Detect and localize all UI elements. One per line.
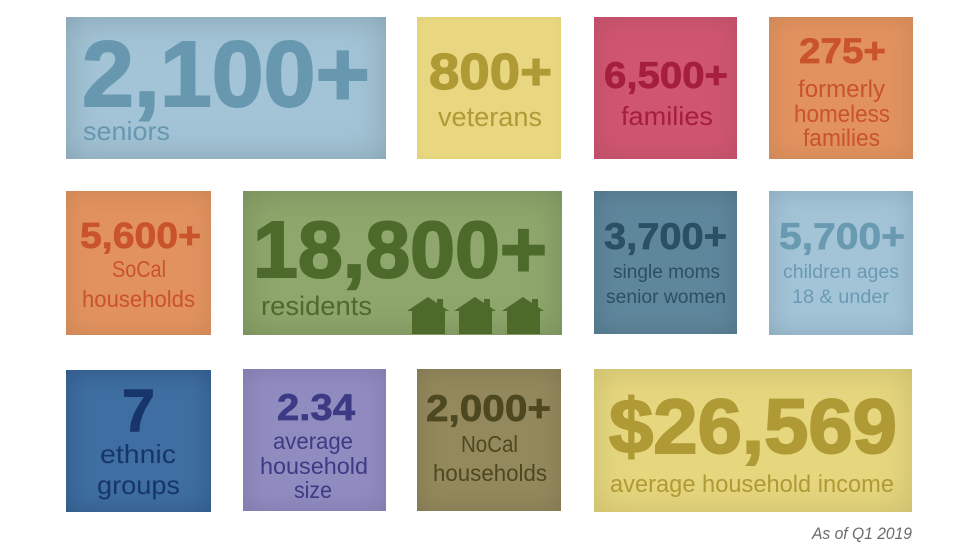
label: average household size: size: [294, 477, 332, 503]
label: formerly homeless families: homeless: [794, 101, 890, 128]
footnote: As of Q1 2019: [811, 525, 912, 543]
label: average household size: [260, 428, 368, 503]
panel: children: [769, 191, 913, 335]
panel: SoCal households: [66, 191, 211, 335]
label: children ages 18 & under: 18 & under: [792, 287, 890, 308]
stat: 2,000+: 2,000+: [426, 388, 551, 429]
panel: average household size: [243, 369, 386, 511]
label: children ages 18 & under: children ages: [783, 262, 899, 283]
label: formerly homeless families: families: [803, 125, 880, 152]
label: ethnic groups: ethnic: [100, 439, 176, 469]
label: average household size: household: [260, 453, 368, 479]
label: average household income: average household income: [610, 471, 894, 498]
stat: 5,700+: 5,700+: [779, 216, 905, 257]
panel: formerly homeless families: [769, 17, 913, 159]
panel: seniors: [66, 17, 386, 159]
stat: $26,569: $26,569: [609, 384, 897, 470]
label: SoCal households: SoCal: [112, 256, 166, 282]
stat: 6,500+: 6,500+: [604, 55, 728, 96]
label: NoCal households: households: [433, 460, 547, 486]
label: single moms senior women: [606, 262, 726, 308]
icon: houses: [407, 297, 544, 334]
label: NoCal households: [433, 431, 547, 486]
stat: 18,800+: 18,800+: [253, 205, 547, 294]
label: SoCal households: [82, 256, 195, 312]
panel: average household income: [594, 369, 912, 512]
panel: single moms and senior women: [594, 191, 737, 334]
label: single moms senior women: single moms: [613, 262, 720, 283]
label: families: families: [621, 101, 713, 131]
label: formerly homeless families: formerly: [798, 76, 885, 103]
panel: ethnic groups: [66, 370, 211, 512]
label: residents: residents: [261, 291, 372, 321]
stat: 275+: 275+: [799, 32, 886, 71]
stat: 5,600+: 5,600+: [80, 215, 201, 256]
stat: 2.34: 2.34: [277, 387, 355, 428]
panel: residents: [243, 191, 562, 335]
label: average household size: average: [273, 428, 353, 454]
label: SoCal households: households: [82, 286, 195, 312]
label: ethnic groups: groups: [97, 470, 180, 500]
stat: 800+: 800+: [429, 43, 552, 100]
panel: families: [594, 17, 737, 159]
stat: 3,700+: 3,700+: [604, 216, 727, 257]
label: ethnic groups: [97, 439, 180, 500]
label: veterans: veterans: [438, 102, 542, 132]
stat: 7: 7: [122, 377, 155, 444]
panel: veterans: [417, 17, 561, 159]
label: formerly homeless families: [794, 76, 890, 152]
panel: NoCal households: [417, 369, 561, 511]
label: single moms senior women: senior women: [606, 287, 726, 308]
label: children ages 18 & under: [783, 262, 899, 308]
label: NoCal households: NoCal: [461, 431, 518, 457]
stat: 2,100+: 2,100+: [82, 22, 370, 126]
label: seniors: seniors: [83, 116, 170, 146]
